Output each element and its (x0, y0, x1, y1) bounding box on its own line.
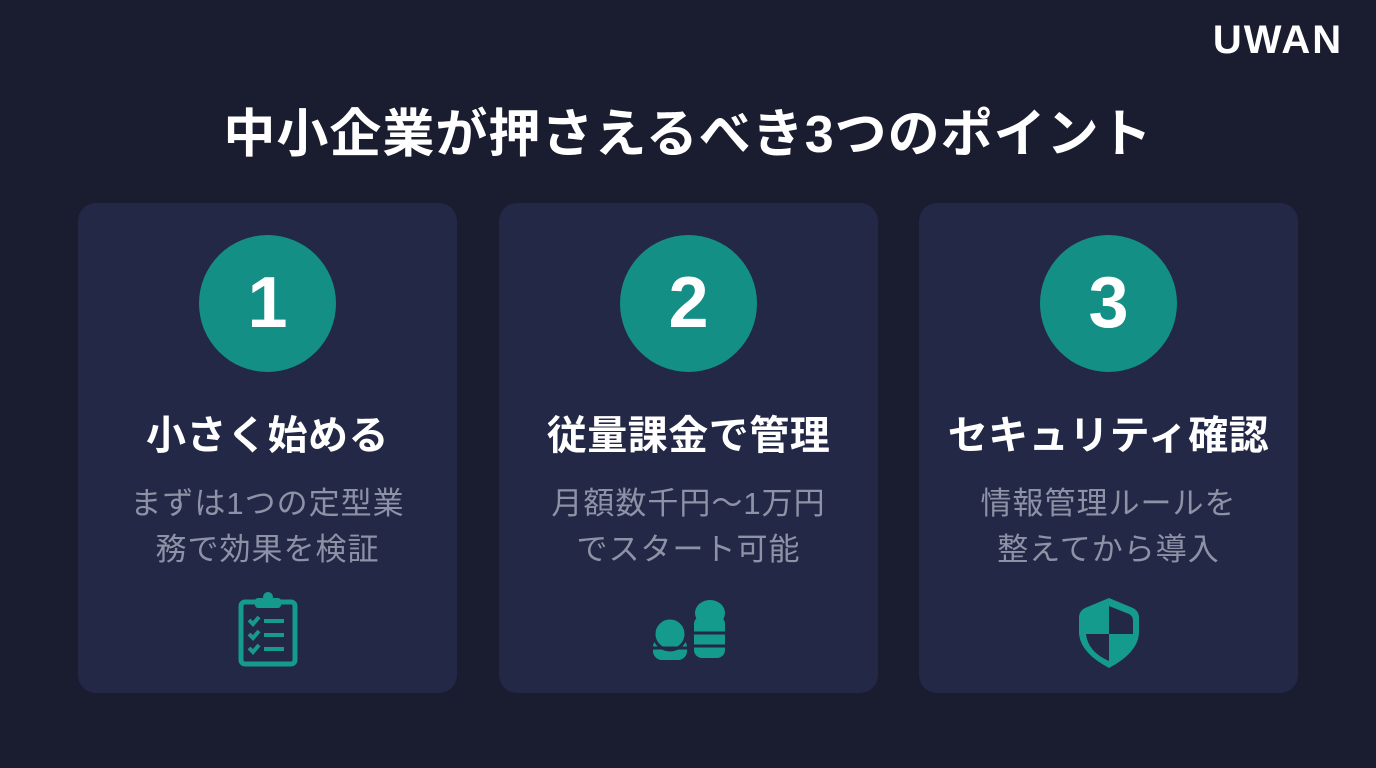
heading 3: セキュリティ確認 (948, 414, 1269, 458)
icon: clipboard (238, 592, 298, 666)
panel: point 1 (78, 203, 457, 693)
number badge 2: 2 (668, 263, 709, 343)
icon: coins (653, 600, 725, 660)
panel: point 2 (499, 203, 878, 693)
body 3: 整えてから導入 (997, 532, 1220, 567)
number badge 3 (1040, 235, 1177, 372)
body 3: 情報管理ルールを (980, 486, 1236, 521)
number badge 3: 3 (1088, 263, 1129, 343)
number badge 2 (620, 235, 757, 372)
heading 1: 小さく始める (146, 414, 389, 458)
heading 2: 従量課金で管理 (547, 414, 830, 458)
body 2: 月額数千円〜1万円 (551, 486, 826, 521)
icon: shield (1079, 598, 1139, 668)
logo: UWAN (1213, 18, 1343, 62)
body 1 (130, 486, 405, 567)
title: 中小企業が押さえるべき3つのポイント (223, 106, 1153, 164)
number badge 1: 1 (247, 263, 288, 343)
body 1: 務で効果を検証 (156, 532, 380, 567)
panel: point 3 (919, 203, 1298, 693)
body 1: まずは1つの定型業 (130, 486, 405, 521)
body 3 (980, 486, 1236, 567)
body 2: でスタート可能 (576, 532, 800, 567)
body 2 (551, 486, 826, 567)
number badge 1 (199, 235, 336, 372)
